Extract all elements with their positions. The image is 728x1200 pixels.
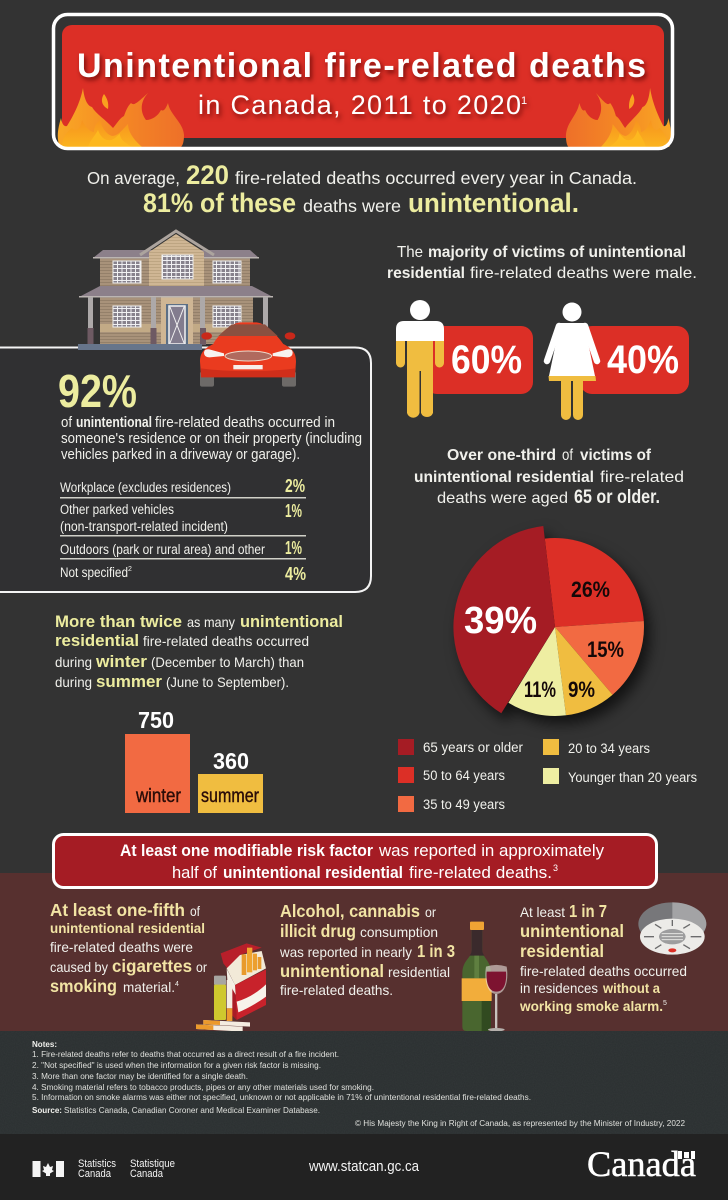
main title text: in Canada, 2011 to 2020	[198, 90, 521, 120]
panel: location of deaths	[0, 231, 371, 592]
cigarettes text: unintentional residential	[50, 920, 205, 936]
smoke alarm text: At least	[520, 904, 565, 920]
age statement: victims of	[580, 447, 652, 464]
cigarettes text: 4	[175, 981, 179, 988]
male majority text: majority of victims of unintentional	[428, 244, 686, 261]
table: other locations: Outdoors (park or rural area) and other	[60, 542, 265, 557]
icon: red car	[200, 322, 296, 387]
notes text	[32, 1040, 686, 1128]
slice: 9%	[555, 627, 613, 715]
smoke alarm text: unintentional	[520, 921, 624, 941]
substance use text	[279, 901, 455, 998]
pie legend: 65 years or older	[423, 740, 523, 755]
website: www.statcan.gc.ca	[308, 1158, 420, 1175]
age statement: of	[562, 447, 573, 464]
slice: 26%	[545, 538, 644, 627]
bar chart: winter vs summer	[125, 707, 263, 813]
substance use text: consumption	[360, 924, 438, 940]
seasonal text: during	[55, 674, 92, 690]
bar: winter	[125, 707, 190, 813]
female badge	[580, 326, 689, 394]
male majority text: fire-related deaths were male.	[470, 265, 697, 282]
cigarettes text: cigarettes	[112, 956, 192, 976]
substance use text: unintentional	[280, 961, 384, 981]
risk factor callout: fire-related deaths.	[409, 864, 552, 882]
footer	[0, 1134, 728, 1200]
seasonal text: fire-related deaths occurred	[143, 633, 309, 649]
icon: smoke alarm	[638, 902, 706, 955]
statistic: 40%: 40%	[607, 338, 679, 382]
intro statement: On average,	[87, 168, 180, 188]
pie labels: 11%	[524, 677, 556, 702]
bar: summer: summer	[201, 786, 260, 807]
logo: Statistics Canada	[32, 1158, 175, 1180]
pie legend	[398, 739, 697, 812]
cigarettes text: caused by	[50, 959, 108, 975]
substance use text: illicit drug	[280, 921, 356, 941]
cigarettes text	[50, 900, 207, 996]
notes text: 3. More than one factor may be identified for a single death.	[32, 1072, 248, 1081]
pie chart: age groups	[453, 526, 644, 716]
title banner	[54, 14, 672, 148]
table: other locations: 4%	[285, 564, 306, 584]
logo: Statistics Canada: Canada	[78, 1168, 112, 1180]
intro statement: 81% of these	[143, 188, 296, 218]
substance use text: was reported in nearly	[279, 944, 412, 960]
cigarettes text: material.	[123, 979, 175, 995]
bar: summer	[198, 748, 263, 813]
seasonal text: summer	[96, 672, 162, 691]
table: other locations: 2%	[285, 476, 305, 496]
table: other locations: Workplace (excludes residences)	[60, 480, 231, 495]
icon: house	[78, 231, 273, 350]
main title text	[77, 47, 646, 120]
age statement: 65 or older.	[574, 487, 660, 508]
smoke alarm text: working smoke alarm.	[519, 998, 663, 1014]
female share	[547, 302, 689, 420]
intro statement: fire-related deaths occurred every year in Canada.	[235, 168, 637, 188]
table: other locations	[60, 476, 306, 584]
smoke alarm text: 1 in 7	[569, 901, 607, 921]
male majority text	[387, 244, 697, 282]
male majority text: The	[397, 244, 423, 261]
icon: right flames	[566, 88, 671, 147]
smoke alarm text: fire-related deaths occurred	[520, 963, 687, 979]
intro statement: 220	[186, 160, 229, 190]
age statement: unintentional residential	[414, 469, 594, 486]
seasonal text: unintentional	[240, 612, 343, 631]
main title text: 1	[521, 95, 527, 107]
age statement: deaths were aged	[437, 490, 568, 507]
slice: 15%	[555, 621, 644, 695]
cigarettes text: fire-related deaths were	[50, 939, 193, 955]
bar: winter: 750	[138, 707, 174, 733]
logo: Statistics Canada: Canada	[130, 1168, 164, 1180]
age statement: Over one-third	[447, 447, 556, 464]
title outline	[54, 14, 672, 148]
table: other locations: Not specified	[60, 565, 128, 580]
main title text: Unintentional fire-related deaths	[77, 47, 646, 85]
cigarettes text: smoking	[50, 976, 117, 996]
male share	[396, 300, 533, 418]
panel outline	[0, 348, 371, 592]
pie labels	[464, 577, 624, 702]
pie labels: 26%	[571, 577, 610, 602]
substance use text: fire-related deaths.	[280, 982, 393, 998]
icon: male figure	[396, 300, 444, 418]
risk factor callout: At least one modifiable risk factor	[120, 842, 374, 860]
slice: 39%	[453, 526, 555, 713]
seasonal text: during	[55, 654, 92, 670]
substance use text: residential	[388, 964, 450, 980]
table: other locations: 1%	[285, 501, 302, 521]
table: other locations: Other parked vehicles	[60, 502, 174, 517]
seasonal text	[55, 612, 343, 691]
cigarettes text: or	[196, 959, 207, 975]
statistic: 92%: 92%	[58, 365, 137, 417]
pie labels: 15%	[587, 637, 624, 662]
male majority text: residential	[387, 265, 465, 282]
statistic: 60%: 60%	[451, 338, 522, 382]
pie labels: 9%	[568, 677, 595, 702]
pie legend: Younger than 20 years	[568, 770, 697, 785]
smoke alarm text: residential	[520, 941, 604, 961]
risk factor callout: half of	[172, 864, 217, 882]
notes text: Source:	[32, 1106, 62, 1115]
icon: female figure	[547, 302, 597, 420]
title red panel	[62, 25, 664, 138]
residence description: of	[61, 415, 73, 431]
pie labels: 39%	[464, 600, 537, 642]
table: other locations: 2	[128, 566, 132, 573]
residence description: someone's residence or on their property (including	[61, 431, 362, 447]
logo: Statistics Canada: Statistics	[78, 1158, 116, 1170]
substance use text: Alcohol, cannabis	[280, 901, 420, 921]
notes text: 4. Smoking material refers to tobacco products, pipes or any other materials used for smoking.	[32, 1083, 374, 1092]
smoke alarm text	[519, 901, 687, 1014]
residence description	[61, 415, 362, 463]
smoke alarm text: 5	[663, 1000, 667, 1007]
icon: wine bottle and glass	[462, 922, 507, 1031]
notes text: Notes:	[32, 1040, 57, 1049]
cigarettes text: At least one-fifth	[50, 900, 185, 920]
substance use text: 1 in 3	[417, 941, 455, 961]
table: other locations: 1%	[285, 538, 302, 558]
notes text: Statistics Canada, Canadian Coroner and Medical Examiner Database.	[64, 1106, 320, 1115]
risk factor band	[0, 873, 728, 1031]
residence description: fire-related deaths occurred in	[155, 415, 335, 431]
risk factor callout: was reported in approximately	[378, 842, 605, 860]
bar: summer: 360	[213, 748, 249, 774]
risk factor callout	[54, 834, 656, 888]
bar: winter: winter	[135, 786, 182, 807]
seasonal text: More than twice	[55, 612, 182, 631]
risk factor callout: unintentional residential	[223, 864, 403, 882]
male badge	[425, 326, 533, 394]
pie legend: 20 to 34 years	[568, 741, 650, 756]
cigarettes text: of	[190, 903, 200, 919]
seasonal text: (December to March) than	[151, 654, 304, 670]
seasonal text: winter	[95, 652, 147, 671]
logo: Statistics Canada: Statistique	[130, 1158, 175, 1170]
seasonal text: residential	[55, 631, 139, 650]
residence description: vehicles parked in a driveway or garage).	[61, 447, 300, 463]
age statement	[414, 447, 684, 508]
intro statement	[87, 160, 637, 218]
pie legend: 35 to 49 years	[423, 797, 505, 812]
pie legend: 50 to 64 years	[423, 768, 505, 783]
risk factor callout: 3	[553, 863, 558, 873]
intro statement: unintentional.	[408, 188, 579, 218]
smoke alarm text: in residences	[520, 980, 598, 996]
notes panel	[0, 1031, 728, 1134]
residence description: unintentional	[76, 415, 152, 431]
substance use text: or	[425, 904, 436, 920]
seasonal text: (June to September).	[166, 674, 289, 690]
notes text: 2. "Not specified" is used when the information for a given risk factor is missing.	[32, 1061, 321, 1070]
icon: left flames	[58, 88, 184, 147]
seasonal text: as many	[187, 614, 235, 630]
icon: cigarettes and lighter	[196, 943, 266, 1032]
intro statement: deaths were	[303, 196, 401, 216]
slice: 11%	[508, 627, 566, 716]
smoke alarm text: without a	[602, 980, 660, 996]
notes text: 5. Information on smoke alarms was either not specified, unknown or not applicable in 71% of unintentional residential fire-related deaths.	[32, 1093, 531, 1102]
notes text: 1. Fire-related deaths refer to deaths that occurred as a direct result of a fire incident.	[32, 1050, 339, 1059]
table: other locations: (non-transport-related incident)	[60, 519, 228, 534]
logo: Canada wordmark: Canada	[587, 1144, 696, 1184]
age statement: fire-related	[600, 469, 684, 486]
notes text: © His Majesty the King in Right of Canada, as represented by the Minister of Industry, 2022	[355, 1119, 686, 1128]
